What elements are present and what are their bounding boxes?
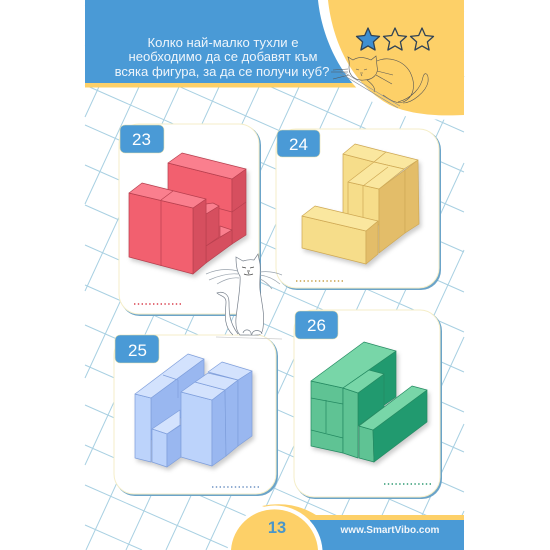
figure: red blocks <box>129 153 246 274</box>
label: 23 <box>120 125 164 153</box>
label: 24 <box>277 130 320 157</box>
page number: 13 <box>268 519 286 537</box>
panel: card 23 <box>119 124 261 316</box>
label: 25: 25 <box>128 341 147 360</box>
question text: Колко най-малко тухли е <box>147 35 299 50</box>
header banner <box>85 0 464 120</box>
label: 26 <box>295 311 338 339</box>
icon: standing cat <box>206 254 282 339</box>
figure: blue blocks <box>135 354 252 467</box>
answer line: 24 <box>296 280 344 282</box>
website url: www.SmartVibo.com <box>340 525 440 536</box>
label: 26: 26 <box>307 316 326 335</box>
answer line: 23 <box>134 303 182 305</box>
figure: green blocks <box>311 342 427 462</box>
label: 23: 23 <box>132 130 151 149</box>
question text line 3: всяка фигура, за да се получи куб? <box>115 64 329 79</box>
figure: yellow blocks <box>302 144 419 264</box>
footer band <box>228 504 464 550</box>
icon: difficulty stars <box>356 28 434 50</box>
icon: sleeping cat <box>331 56 428 108</box>
panel: card 24 <box>276 129 441 290</box>
label: 24: 24 <box>289 135 308 154</box>
panel: card 25 <box>114 335 278 496</box>
question text line 2: необходимо да се добавят към <box>128 49 318 64</box>
answer line: 25 <box>212 486 260 488</box>
panel: card 26 <box>294 310 442 499</box>
answer line: 26 <box>384 483 432 485</box>
label: 25 <box>115 335 159 363</box>
